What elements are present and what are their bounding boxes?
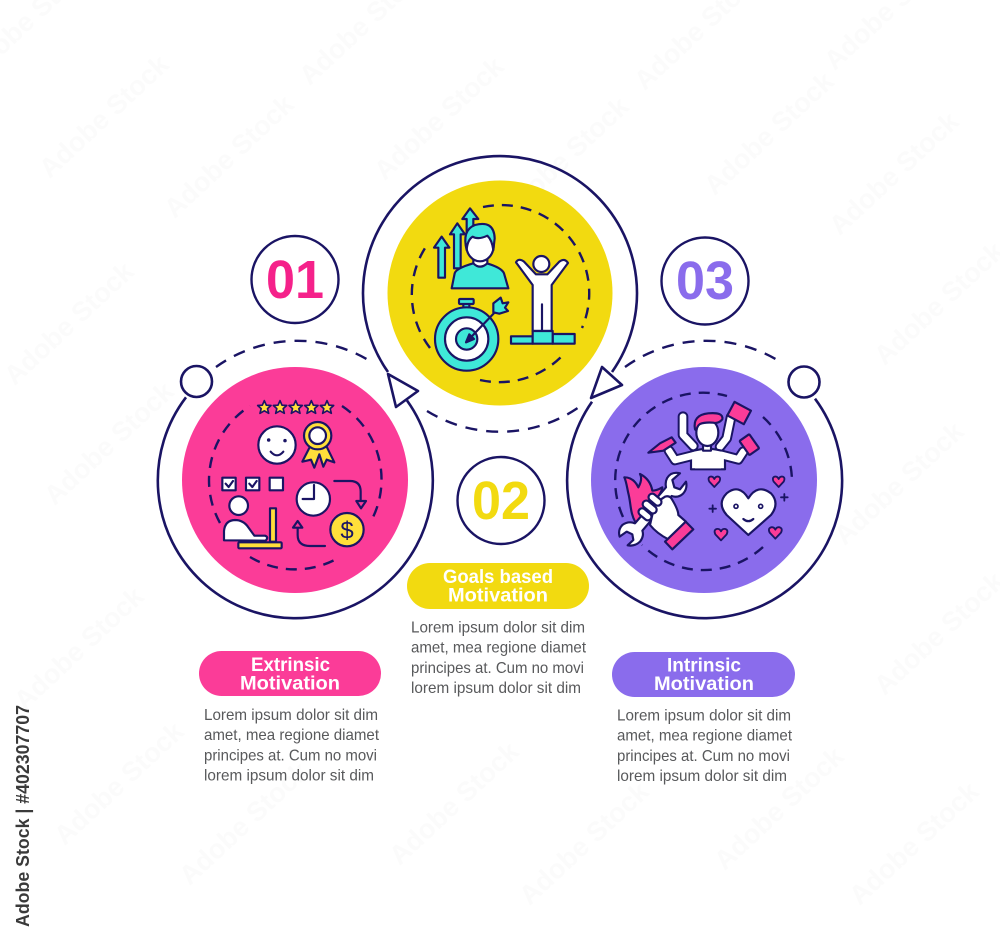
text block: goals description: Lorem ipsum dolor sit dim [411,620,585,636]
ring start node [788,366,820,398]
icon: checklist [222,478,283,490]
label pill: intrinsic motivation: Motivation [654,674,754,695]
stock watermark: Adobe Stock [828,416,970,551]
icon group: goals and achievement [434,208,575,371]
stock watermark: Adobe Stock [843,776,985,911]
stock watermark: Adobe Stock [493,91,635,226]
icon: winner on podium [511,256,575,344]
outer ring [363,156,637,372]
label pill: extrinsic motivation [199,651,381,696]
icon: five stars [258,401,334,413]
text block: extrinsic description: Lorem ipsum dolor sit dim [204,707,378,724]
dashed connector [427,405,582,432]
text block: extrinsic description: principes at. Cum no movi [204,748,377,764]
inner dashed ring [615,393,792,570]
icon: dollar coin [330,513,364,546]
text block: goals description: principes at. Cum no movi [411,660,584,677]
stock watermark: Adobe Stock [173,756,315,891]
number badge 03: 03 [676,251,734,311]
text block: intrinsic description [617,708,793,785]
inner dashed ring [412,205,589,382]
panel: extrinsic motivation circle [158,341,433,618]
icon: rising arrows [434,208,478,278]
number badge 03 [662,238,748,324]
number badge 01 [252,236,338,323]
panel: goals based motivation circle [363,156,637,432]
arrow: money to clock [293,521,325,546]
stock watermark: Adobe Stock [708,741,850,876]
stock watermark: Adobe Stock [823,106,965,241]
arrowhead [388,374,418,407]
text block: intrinsic description: principes at. Cum no movi [617,748,790,765]
arrowhead [591,367,622,398]
text block: extrinsic description [204,707,380,784]
icon: smiling heart [722,489,775,535]
text block: extrinsic description: lorem ipsum dolor sit dim [204,768,374,784]
icon group: rating, deadline and pay [222,401,366,548]
outer ring [158,397,433,618]
ring start node [181,366,212,397]
icon: wrench in fist [619,473,693,549]
outer ring [567,399,842,618]
icon: small hearts and plus signs [709,477,788,540]
stock watermark: Adobe Stock [513,776,655,911]
purple filled disc [591,367,817,593]
label pill: goals based motivation [407,563,589,609]
number badge 02: 02 [472,471,530,531]
stock watermark: Adobe Stock [8,581,150,716]
icon group: inner drive [619,402,788,549]
pink filled disc [182,367,408,593]
panel: intrinsic motivation circle [567,341,842,618]
icon: stopwatch target [435,298,508,371]
stock watermark: Adobe Stock [383,736,525,871]
stock watermark: Adobe Stock [368,51,510,186]
icon: multitasking person [648,402,759,469]
text block: goals description: amet, mea regione diamet [411,640,587,656]
dashed connector [625,341,779,367]
stock watermark: Adobe Stock [33,49,175,184]
label pill: extrinsic motivation: Extrinsic [251,655,330,676]
icon: person at laptop [224,496,282,548]
text block: intrinsic description: lorem ipsum dolor sit dim [617,768,787,785]
icon: man portrait [452,224,508,288]
text block: extrinsic description: amet, mea regione diamet [204,727,380,744]
stock watermark: Adobe Stock [38,376,180,511]
label pill: goals based motivation: Goals based [443,567,553,588]
icon: dollar coin: $ [340,517,354,544]
stock watermark: Adobe Stock [158,89,300,224]
stock credit vertical text: Adobe Stock | #402307707 [13,705,33,927]
stock watermark: Adobe Stock [0,256,140,391]
text block: goals description [411,620,587,697]
text block: goals description: lorem ipsum dolor sit dim [411,680,581,697]
dashed connector [216,341,370,367]
number badge 01: 01 [266,250,324,310]
icon: clock [297,482,330,516]
label pill: extrinsic motivation: Motivation [240,674,340,694]
arrow: clock to money [334,481,366,508]
label pill: intrinsic motivation [612,652,795,697]
icon: award ribbon [302,422,334,468]
label pill: goals based motivation: Motivation [448,586,548,606]
stock watermark: Adobe Stock [698,66,840,201]
number badge 02 [458,457,544,544]
inner dashed ring [209,406,382,569]
icon: flame [624,474,662,523]
stock watermark: Adobe Stock [48,716,190,851]
label pill: intrinsic motivation: Intrinsic [667,656,741,676]
text block: intrinsic description: amet, mea regione diamet [617,728,793,744]
yellow filled disc [388,180,612,406]
text block: intrinsic description: Lorem ipsum dolor sit dim [617,708,791,724]
icon: smiley face [258,426,296,464]
